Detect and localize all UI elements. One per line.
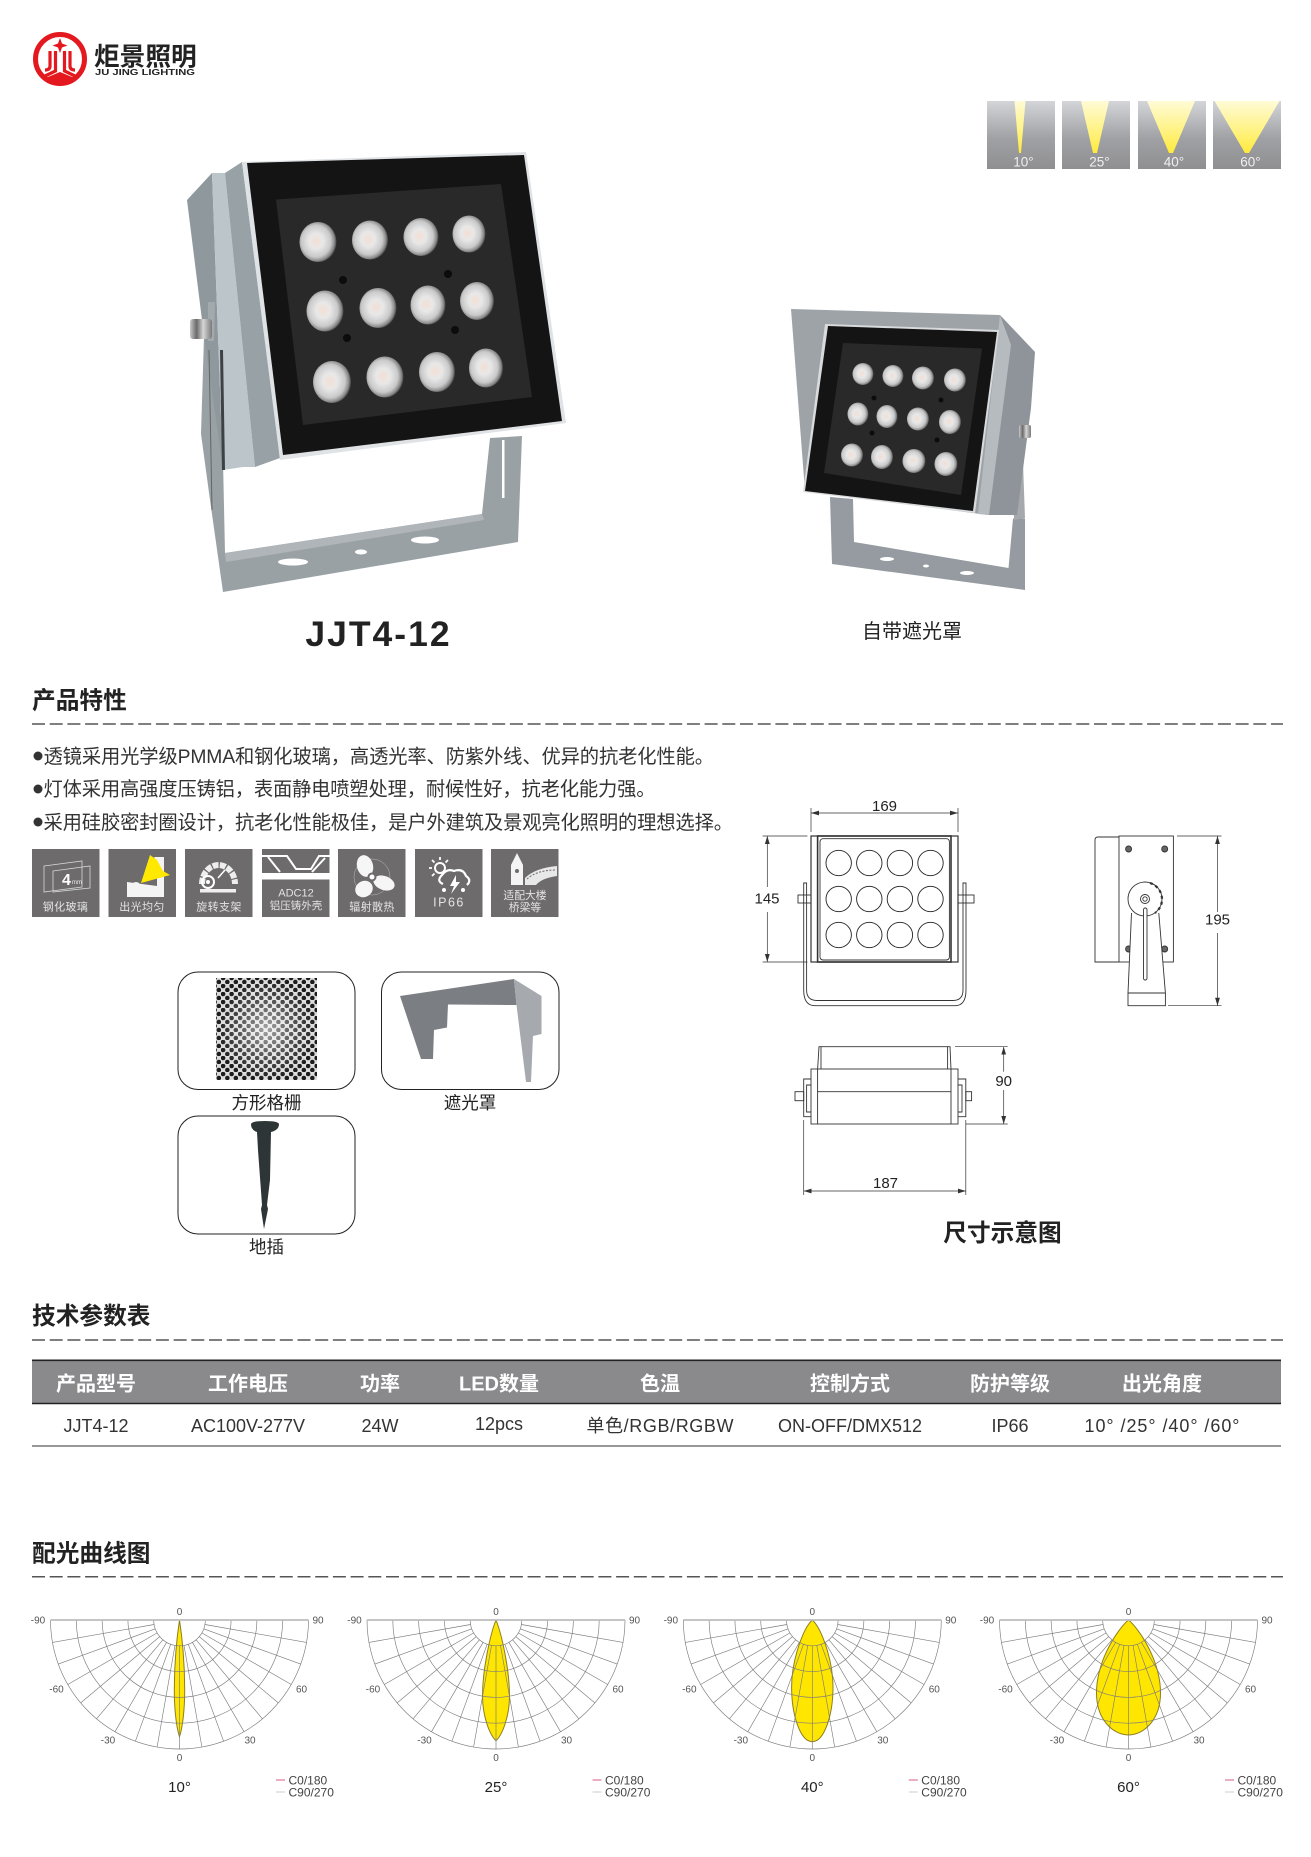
dimension drawing: front view <box>754 798 974 1006</box>
polar chart: 40 degrees: 30 <box>877 1736 889 1746</box>
beam angle tiles: 25° <box>1089 154 1110 170</box>
accessory: square grille: 方形格栅 <box>232 1093 302 1113</box>
table header: 功率 <box>360 1372 400 1396</box>
polar chart: 40 degrees: 0 <box>810 1607 816 1618</box>
hood caption: 自带遮光罩 <box>862 620 962 643</box>
heading: dimension diagram: 尺寸示意图 <box>943 1219 1062 1247</box>
polar chart: 60 degrees: C0/180 <box>1238 1774 1277 1788</box>
polar chart: 10 degrees: 0 <box>177 1607 183 1618</box>
table header: 控制方式 <box>810 1372 890 1396</box>
polar chart: 60 degrees: 90 <box>1261 1616 1273 1626</box>
polar chart: 60 degrees: -60 <box>998 1684 1013 1696</box>
polar chart: 10 degrees: 60 <box>296 1684 307 1696</box>
polar chart: 40 degrees: C90/270 <box>921 1786 967 1800</box>
polar chart: 60 degrees: 0 <box>1126 1753 1132 1764</box>
table header: 出光角度 <box>1122 1372 1202 1396</box>
polar chart: 60 degrees: 60 <box>1245 1684 1256 1696</box>
polar chart: 25 degrees <box>347 1607 651 1800</box>
polar chart: 60 degrees: -30 <box>1050 1736 1065 1746</box>
polar chart: 25 degrees: -60 <box>366 1684 381 1696</box>
accessory: hood: 遮光罩 <box>444 1093 496 1113</box>
product name: JJT4-12 <box>305 614 452 654</box>
accessory: hood <box>382 972 559 1113</box>
dimension drawing: top view: 187 <box>873 1175 898 1192</box>
polar chart: 25 degrees: C0/180 <box>605 1774 644 1788</box>
polar chart: 25 degrees: 0 <box>493 1607 499 1618</box>
polar chart: 10 degrees: 90 <box>312 1616 324 1626</box>
icon: IP66 weather: IP66 <box>433 896 465 910</box>
icon: buildings and bridges <box>491 849 558 917</box>
polar chart: 40 degrees: 60 <box>929 1684 940 1696</box>
icon: IP66 weather <box>415 849 482 917</box>
polar chart: 10 degrees: 0 <box>177 1753 183 1764</box>
logo <box>36 34 197 84</box>
table row: AC100V-277V <box>191 1416 305 1436</box>
polar chart: 25 degrees: -90 <box>347 1616 362 1626</box>
polar chart: 10 degrees: C90/270 <box>288 1786 334 1800</box>
icon: tempered glass: mm <box>72 880 82 886</box>
beam angle tiles: 40° <box>1164 154 1184 170</box>
icon: uniform light: 出光均匀 <box>119 900 165 914</box>
icon: rotating bracket: 旋转支架 <box>196 900 242 914</box>
polar chart: 10 degrees: -60 <box>49 1684 64 1696</box>
dimension drawing: top view <box>795 1047 1012 1195</box>
dimension drawing: side view: 195 <box>1205 912 1230 928</box>
polar chart: 10 degrees: 10° <box>168 1779 191 1796</box>
table row: ON-OFF/DMX512 <box>778 1416 922 1436</box>
table header: 防护等级 <box>970 1372 1050 1396</box>
polar chart: 40 degrees: 0 <box>810 1753 816 1764</box>
feature icons row <box>32 849 558 917</box>
polar chart: 40 degrees <box>664 1607 967 1800</box>
table row <box>63 1414 1240 1436</box>
icon: die-cast housing: 铝压铸外壳 <box>270 899 323 912</box>
polar chart: 40 degrees: -90 <box>664 1616 678 1626</box>
feature text <box>34 741 733 835</box>
heading: technical parameters: 技术参数表 <box>32 1302 151 1330</box>
table row: 10° /25° /40° /60° <box>1084 1416 1240 1436</box>
polar chart: 40 degrees: -30 <box>734 1736 748 1746</box>
icon: radiating fan: 辐射散热 <box>349 900 395 914</box>
icon: rotating bracket <box>185 849 252 917</box>
icon: buildings and bridges: 桥梁等 <box>509 900 541 914</box>
icon: uniform light <box>108 849 176 917</box>
parameters table <box>32 1360 1281 1446</box>
beam angle tiles <box>987 101 1281 170</box>
beam angle tiles: 60° <box>1240 154 1261 170</box>
polar chart: 60 degrees <box>980 1607 1283 1800</box>
polar chart: 10 degrees: 30 <box>244 1736 256 1746</box>
polar chart: 60 degrees: C90/270 <box>1238 1786 1283 1800</box>
polar chart: 40 degrees: C0/180 <box>921 1774 960 1788</box>
main product photo <box>187 152 566 592</box>
polar chart: 60 degrees: -90 <box>980 1616 995 1626</box>
accessory: square grille <box>178 972 355 1113</box>
icon: radiating fan <box>338 849 406 917</box>
table row: 12pcs <box>475 1414 523 1434</box>
polar chart: 25 degrees: 90 <box>629 1616 640 1626</box>
accessory: ground spike <box>178 1116 355 1257</box>
feature text: 灯体采用高强度压铸铝，表面静电喷塑处理，耐候性好，抗老化能力强。 <box>44 774 656 802</box>
table header: 产品型号 <box>56 1372 136 1396</box>
table row: 24W <box>361 1416 399 1436</box>
heading: light distribution curves: 配光曲线图 <box>32 1540 150 1568</box>
polar chart: 10 degrees: C0/180 <box>288 1774 328 1788</box>
polar chart: 25 degrees: 60 <box>612 1684 624 1696</box>
table row: 单色/RGB/RGBW <box>586 1416 734 1436</box>
icon: tempered glass: 钢化玻璃 <box>43 900 88 914</box>
polar chart: 25 degrees: C90/270 <box>605 1786 651 1800</box>
table header: 工作电压 <box>208 1372 288 1396</box>
heading: product features: 产品特性 <box>32 688 127 714</box>
icon: die-cast housing: ADC12 <box>278 888 314 900</box>
table header: LED数量 <box>459 1372 539 1396</box>
feature text: 采用硅胶密封圈设计，抗老化性能极佳，是户外建筑及景观亮化照明的理想选择。 <box>44 807 733 835</box>
icon: tempered glass <box>32 849 100 917</box>
product with hood photo <box>791 309 1035 590</box>
polar chart: 10 degrees <box>31 1607 334 1800</box>
logo: 炬景照明 <box>94 42 197 72</box>
accessory: ground spike: 地插 <box>249 1237 284 1257</box>
polar chart: 60 degrees: 30 <box>1193 1736 1205 1746</box>
polar chart: 10 degrees: -90 <box>31 1616 46 1626</box>
beam angle tiles: 10° <box>1013 154 1034 170</box>
dimension drawing: side view <box>1095 836 1230 1006</box>
table header: 色温 <box>640 1372 680 1396</box>
polar chart: 10 degrees: -30 <box>101 1736 116 1746</box>
table header <box>32 1360 1281 1404</box>
icon: buildings and bridges: 适配大楼 <box>503 888 547 902</box>
table row: JJT4-12 <box>63 1416 129 1436</box>
polar chart: 25 degrees: 0 <box>493 1753 499 1764</box>
table row: IP66 <box>991 1416 1029 1436</box>
feature text: 透镜采用光学级PMMA和钢化玻璃，高透光率、防紫外线、优异的抗老化性能。 <box>44 741 714 769</box>
polar chart: 25 degrees: -30 <box>417 1736 432 1746</box>
dimension drawing: front view: 169 <box>872 798 897 815</box>
icon: die-cast housing <box>262 849 330 917</box>
polar chart: 60 degrees: 60° <box>1117 1779 1140 1796</box>
polar chart: 60 degrees: 0 <box>1126 1607 1132 1618</box>
polar chart: 25 degrees: 25° <box>485 1779 507 1796</box>
polar chart: 25 degrees: 30 <box>561 1736 572 1746</box>
polar chart: 40 degrees: -60 <box>682 1684 697 1696</box>
polar chart: 40 degrees: 40° <box>801 1779 824 1796</box>
dimension drawing: front view: 145 <box>754 890 780 908</box>
logo: JU JING LIGHTING <box>95 68 195 77</box>
dimension drawing: top view: 90 <box>995 1073 1012 1090</box>
polar chart: 40 degrees: 90 <box>945 1616 957 1626</box>
icon: tempered glass: 4 <box>62 872 71 889</box>
